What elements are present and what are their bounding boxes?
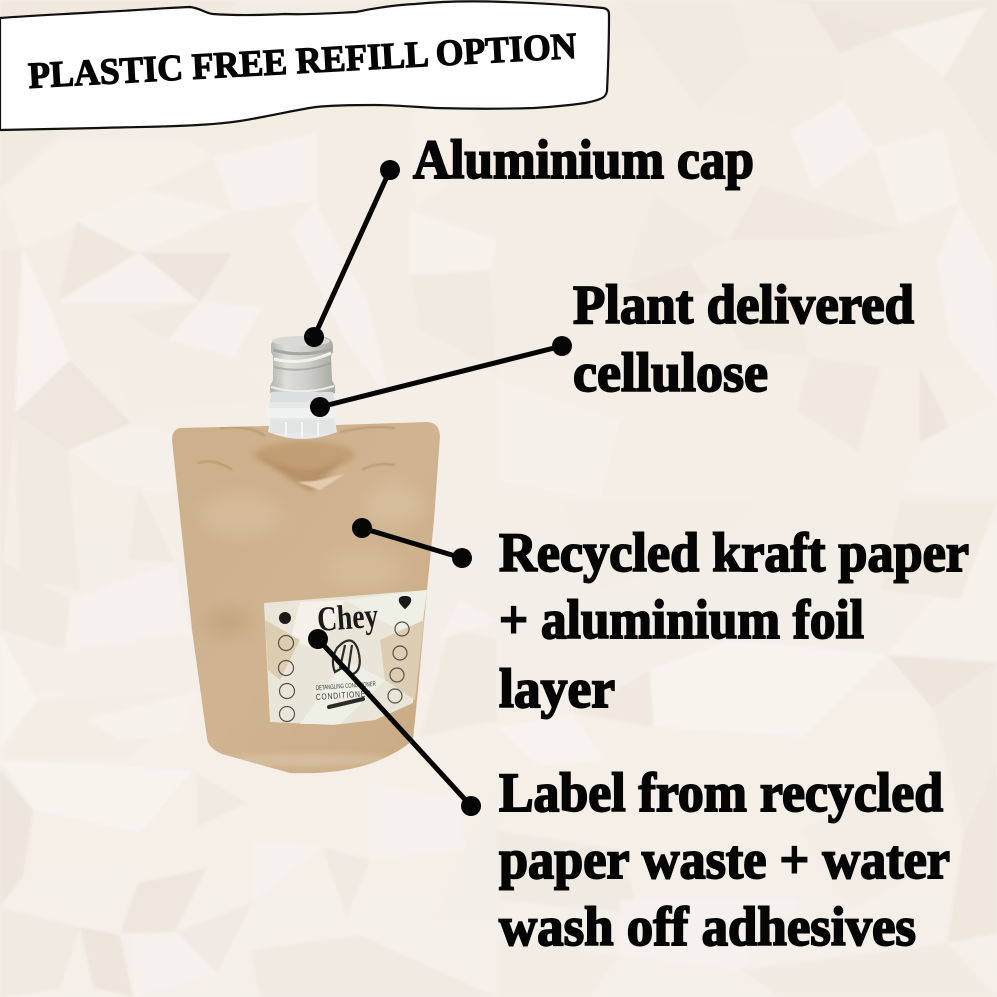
illustration: woman silhouette — [333, 640, 360, 675]
product label — [264, 590, 427, 725]
leader line — [304, 160, 400, 347]
leader line — [310, 336, 572, 417]
brand name: Chey — [316, 596, 380, 639]
product name: DETANGLING CONDITIONER — [316, 681, 376, 692]
label text: Label from recycled — [499, 762, 943, 823]
product name: CONDITIONER — [315, 688, 372, 702]
title text: PLASTIC FREE REFILL OPTION — [27, 26, 578, 97]
leader line — [352, 518, 472, 568]
label text: wash off adhesives — [499, 896, 916, 957]
product: kraft refill pouch — [172, 336, 440, 773]
label icons — [278, 599, 409, 722]
banner shape — [0, 1, 609, 130]
label text: layer — [499, 658, 615, 719]
callout: aluminium cap — [304, 129, 754, 347]
product name — [315, 681, 376, 707]
pouch body — [172, 422, 440, 773]
aluminium cap — [270, 336, 335, 396]
label text — [573, 274, 914, 403]
label text — [499, 522, 969, 719]
label text: Recycled kraft paper — [499, 522, 969, 583]
callout: cellulose collar — [310, 274, 914, 417]
label text — [499, 762, 950, 957]
label text: paper waste + water — [499, 829, 950, 890]
label text: + aluminium foil — [499, 589, 864, 650]
label text: Aluminium cap — [413, 129, 754, 190]
leader line — [308, 629, 481, 816]
spout collar — [266, 392, 337, 439]
callout: label — [308, 629, 950, 957]
title banner — [0, 1, 609, 130]
callout: kraft paper — [352, 518, 969, 719]
label text: cellulose — [573, 342, 768, 403]
label text: Plant delivered — [573, 274, 914, 335]
